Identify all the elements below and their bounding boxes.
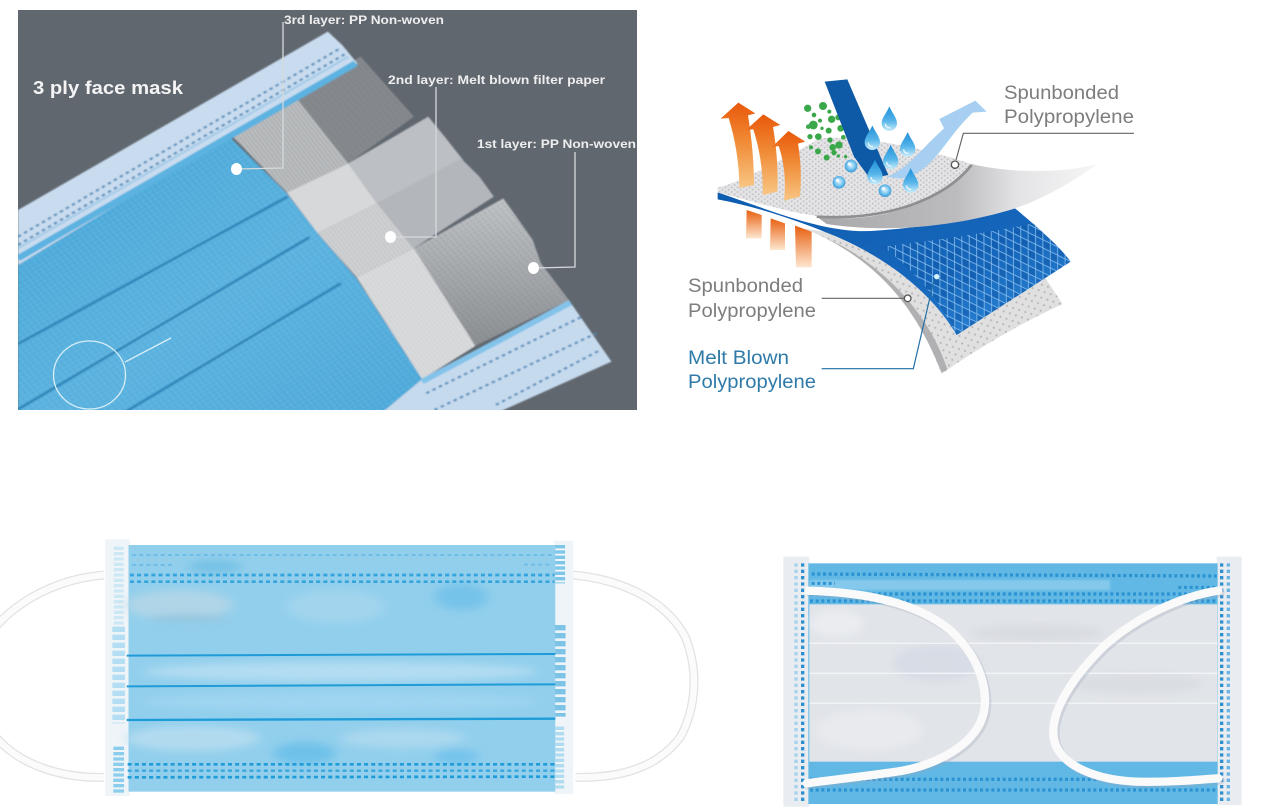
pleat lines (127, 654, 555, 720)
panel: mask back view (783, 557, 1242, 807)
label: melt blown polypropylene: Melt Blown (688, 348, 789, 369)
panel: 3 ply face mask photo (18, 10, 637, 413)
ear loops (0, 575, 694, 777)
water drops (833, 106, 918, 197)
label: top spunbonded polypropylene: Spunbonded (1004, 83, 1119, 104)
stitch squares (796, 563, 1228, 803)
stitch dots (128, 555, 555, 777)
callout: 2nd layer (385, 75, 606, 243)
side tabs (105, 539, 573, 796)
light blue airflow arrow (887, 101, 987, 179)
label: melt blown polypropylene: Polypropylene (688, 372, 816, 393)
upper orange arrows (721, 103, 805, 201)
blue mask edges (808, 563, 1218, 804)
green particles (804, 102, 859, 161)
lower orange arrows (746, 210, 812, 267)
dark blue filter band (825, 79, 888, 179)
callout: 1st layer: 1st layer: PP Non-woven (477, 139, 636, 151)
magnifier circle callout (54, 338, 171, 409)
top spunbonded sheet (718, 138, 1097, 228)
ear loops (807, 591, 1220, 785)
label: lower spunbonded polypropylene: Spunbonded (688, 276, 803, 297)
photo: opened mask layers (18, 32, 611, 413)
white inner layer (809, 580, 1217, 762)
callout: 3rd layer: 3rd layer: PP Non-woven (284, 15, 444, 27)
panel: layer diagram (688, 79, 1134, 393)
side tabs (783, 557, 1242, 807)
diagram artwork (718, 79, 1134, 374)
mask body (125, 545, 555, 792)
melt blown blue sheet (718, 192, 1071, 335)
callout: 3rd layer (231, 15, 444, 175)
callout: 2nd layer: 2nd layer: Melt blown filter paper (388, 75, 606, 87)
callout: 1st layer (477, 139, 636, 274)
label: lower spunbonded polypropylene: Polypropylene (688, 301, 816, 322)
leader lines (822, 133, 1134, 369)
label: top spunbonded polypropylene: Polypropylene (1004, 107, 1134, 128)
heading: 3 ply face mask: 3 ply face mask (33, 78, 184, 98)
panel: mask front view (0, 539, 694, 796)
bottom spunbonded sheet (803, 228, 1063, 374)
